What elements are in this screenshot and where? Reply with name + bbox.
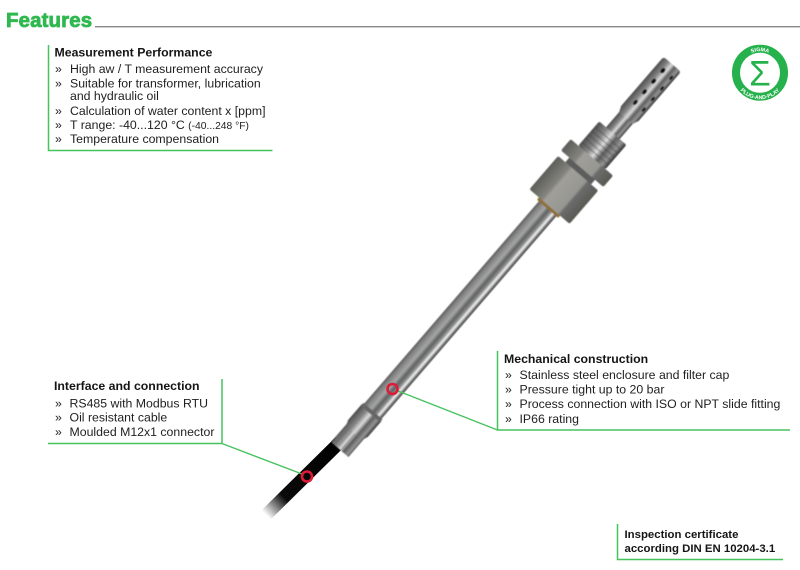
panel: measurement performance: Suitable for transformer, lubrication <box>70 76 261 90</box>
panel: measurement performance: and hydraulic oil <box>70 89 159 103</box>
sensor probe <box>319 46 694 468</box>
panel: interface and connection: » <box>55 396 62 410</box>
thread <box>578 121 626 169</box>
panel: interface and connection: Moulded M12x1 connector <box>70 425 214 439</box>
connector sleeve <box>330 404 382 458</box>
panel: mechanical construction: Process connection with ISO or NPT slide fitting <box>520 397 781 411</box>
hex nut <box>529 156 598 224</box>
icon: sigma plug-and-play badge <box>732 44 788 101</box>
title: Features <box>6 10 92 32</box>
icon: sigma plug-and-play badge: SIGMA <box>750 48 768 53</box>
panel: measurement performance: Measurement Performance <box>54 46 213 60</box>
filter holes <box>632 67 674 113</box>
icon: sigma plug-and-play badge: Σ <box>749 54 771 94</box>
steel tube <box>363 199 558 420</box>
panel: mechanical construction: » <box>505 368 512 382</box>
panel: mechanical construction: IP66 rating <box>520 412 579 426</box>
panel: interface and connection: » <box>55 410 62 424</box>
cable <box>266 442 340 515</box>
panel: mechanical construction: Mechanical construction <box>504 352 648 366</box>
panel: measurement performance: » <box>55 76 62 90</box>
panel: measurement performance: Calculation of water content x [ppm] <box>70 104 265 118</box>
panel: mechanical construction: » <box>505 382 512 396</box>
panel: inspection certificate <box>618 524 783 560</box>
flange nut <box>561 139 613 187</box>
panel: measurement performance: T range: -40...120 °C (-40...248 °F) <box>70 118 249 132</box>
panel: mechanical construction: » <box>505 397 512 411</box>
neck <box>565 157 596 184</box>
panel: measurement performance: » <box>55 62 62 76</box>
brass ring <box>537 196 561 218</box>
title rule <box>95 26 800 27</box>
leader line: interface to cable <box>222 444 302 474</box>
panel: interface and connection: » <box>55 425 62 439</box>
panel: mechanical construction: Stainless steel enclosure and filter cap <box>520 368 730 382</box>
marker: tube point <box>388 384 398 394</box>
marker: cable point <box>302 472 312 482</box>
panel: interface and connection: RS485 with Modbus RTU <box>70 396 208 410</box>
icon: sigma plug-and-play badge: PLUG-AND-PLAY <box>740 88 779 100</box>
panel: mechanical construction: Pressure tight up to 20 bar <box>520 382 664 396</box>
panel: measurement performance: Temperature compensation <box>70 132 219 146</box>
panel: interface and connection: Oil resistant cable <box>70 410 167 424</box>
panel: inspection certificate: Inspection certificate <box>624 529 738 541</box>
leader line: mechanical to tube <box>398 391 498 430</box>
panel: measurement performance: High aw / T measurement accuracy <box>70 62 264 76</box>
panel: mechanical construction: » <box>505 412 512 426</box>
panel: measurement performance: » <box>55 104 62 118</box>
panel: measurement performance: » <box>55 132 62 146</box>
panel: measurement performance <box>48 45 272 150</box>
panel: measurement performance: » <box>55 118 62 132</box>
filter cap <box>617 57 681 126</box>
panel: mechanical construction <box>498 351 790 430</box>
neck to filter <box>606 109 635 139</box>
panel: interface and connection: Interface and connection <box>54 379 200 393</box>
panel: interface and connection <box>48 379 222 444</box>
panel: inspection certificate: according DIN EN 10204-3.1 <box>624 543 776 555</box>
